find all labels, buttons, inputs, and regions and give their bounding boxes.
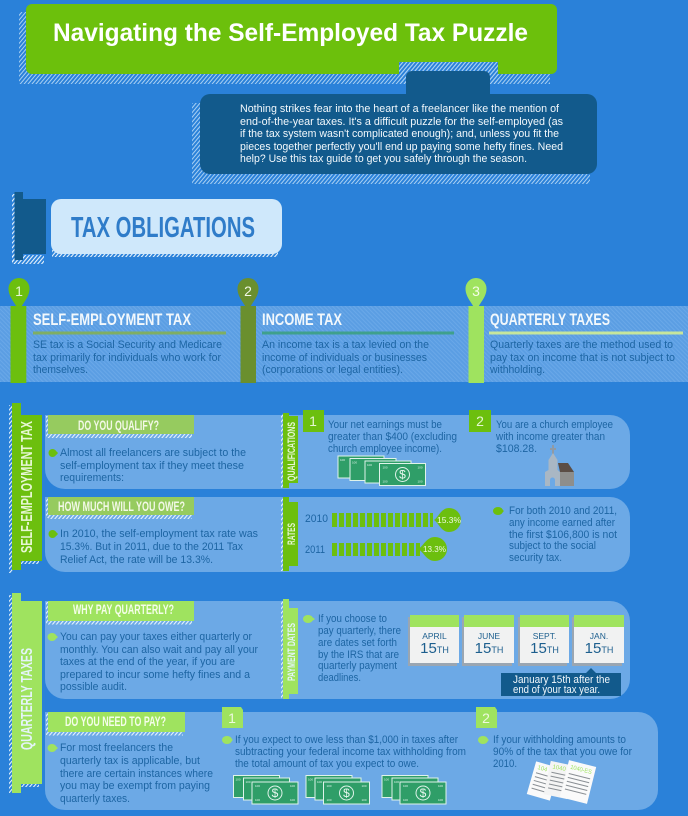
calendar: april [408, 615, 459, 666]
intro text: help? Use this tax guide to get you safely through the season. [240, 153, 527, 165]
icon: money stack: 100 [340, 458, 345, 462]
sidebar: quarterly taxes: QUARTERLY TAXES [19, 648, 36, 750]
section heading: tax obligations [12, 192, 282, 264]
icon: money stack a: 100 [290, 798, 295, 802]
why pay text: prepared to incur some hefty fines and a [60, 669, 251, 681]
column: self-employment tax: themselves. [33, 364, 88, 376]
panel: how much will you owe [45, 497, 630, 572]
column: quarterly taxes: Quarterly taxes are the method used to [490, 339, 673, 351]
tab: how much: HOW MUCH WILL YOU OWE? [58, 498, 185, 514]
payment dates text [303, 613, 401, 684]
column: quarterly taxes: QUARTERLY TAXES [490, 310, 610, 329]
icon: money stack b: 100 [362, 798, 367, 802]
icon: money stack: 100 [382, 480, 388, 484]
qualification 2: $108.28. [496, 443, 537, 455]
tab: do you need to pay [46, 712, 185, 736]
payment dates text: by the IRS that are [318, 649, 399, 661]
icon: money stack [338, 456, 426, 486]
icon: money stack a: $ [272, 786, 279, 800]
column: quarterly taxes: pay tax on income that is not subject to [490, 352, 675, 364]
icon: money stack: 100 [418, 480, 423, 484]
need to pay text: quarterly tax is applicable, but [60, 755, 200, 767]
payment dates text: are dates set forth [318, 637, 397, 649]
why pay text: monthly. You can also wait and pay all your [60, 644, 258, 656]
calendar: january: 15TH [585, 640, 613, 657]
icon: money stack c: 100 [438, 798, 443, 802]
calendar: september: 15TH [530, 640, 559, 657]
qualification 1: Your net earnings must be [328, 419, 442, 431]
column: income tax: (corporations or legal entities). [262, 364, 403, 376]
qualification 2: 2 [476, 413, 484, 429]
qualification 2: You are a church employee [496, 419, 613, 431]
icon: church [545, 445, 574, 486]
column: self-employment tax [8, 278, 226, 383]
tab: do you qualify: DO YOU QUALIFY? [78, 417, 159, 433]
payment dates text: quarterly payment [318, 660, 397, 672]
payment dates text: pay quarterly, there [318, 625, 401, 637]
icon: tax forms: 1040-ES [570, 765, 592, 776]
panel: do you need to pay [45, 707, 658, 810]
owe text: 15.3%. But in 2011, due to the 2011 Tax [60, 541, 243, 553]
chart: 2010 rate: 2010 [305, 513, 328, 525]
icon: tax forms: 1040 [552, 764, 567, 773]
icon: money stack b: 100 [326, 784, 332, 788]
exemption 2: 90% of the tax that you owe for [493, 746, 632, 758]
column: self-employment tax: tax primarily for individuals who work for [33, 352, 221, 364]
tab: why pay quarterly: WHY PAY QUARTERLY? [73, 601, 174, 617]
qualify text: requirements: [60, 472, 124, 484]
icon: tax forms [527, 760, 596, 804]
need to pay text: there are certain instances where [60, 768, 213, 780]
why pay text: taxes at the end of the year, if you are [60, 656, 235, 668]
icon: money stack b: $ [343, 786, 350, 800]
intro text: pieces together perfectly you'll end up paying some hefty fines. Need [240, 141, 563, 153]
need to pay text [48, 742, 213, 805]
sidebar: self-employment tax: SELF-EMPLOYMENT TAX [19, 421, 36, 553]
icon: money stack b: 100 [326, 798, 332, 802]
title banner [19, 4, 557, 84]
tab: do you qualify [46, 415, 194, 438]
calendar: september: SEPT. [533, 631, 556, 641]
icon: money stack c: $ [420, 786, 427, 800]
icon: money stack a: 100 [246, 780, 251, 784]
social security note: security tax. [509, 552, 562, 564]
side tab: rates [281, 497, 298, 571]
qualification 1 [303, 410, 457, 455]
column: income tax: An income tax is a tax levied on the [262, 339, 429, 351]
intro text: Nothing strikes fear into the heart of a freelancer like the mention of [240, 103, 560, 115]
icon: money stack c: 100 [403, 798, 408, 802]
exemption 1 [222, 707, 466, 770]
need to pay text: For most freelancers the [60, 742, 173, 754]
side tab: qualifications: QUALIFICATIONS [286, 422, 298, 481]
icon: money stack b: 100 [308, 778, 313, 782]
panel: do you qualify [45, 410, 630, 489]
sidebar: quarterly taxes [9, 593, 42, 793]
exemption 2 [476, 707, 632, 770]
need to pay text: you may be exempt from paying [60, 780, 210, 792]
social security note: subject to the social [509, 540, 596, 552]
owe text: Relief Act, the rate will be 13.3%. [60, 554, 213, 566]
icon: money stack b [306, 776, 370, 804]
exemption 1: the total amount of tax you expect to owe. [235, 758, 419, 770]
owe text [48, 528, 258, 566]
tab: how much [46, 497, 194, 519]
qualification 2: with income greater than [495, 431, 605, 443]
column: income tax: 2 [244, 283, 252, 299]
calendar: june: JUNE [478, 631, 500, 641]
icon: money stack b: 100 [317, 780, 322, 784]
sidebar: self-employment tax [9, 403, 42, 573]
social security note: For both 2010 and 2011, [509, 505, 617, 517]
why pay text: You can pay your taxes either quarterly or [60, 631, 252, 643]
qualification 1: greater than $400 (excluding [328, 431, 457, 443]
icon: money stack c: 100 [394, 780, 399, 784]
calendar: june [462, 615, 514, 666]
chart: 2011 rate [305, 537, 447, 561]
qualify text: self-employment tax if they meet these [60, 460, 244, 472]
calendar: april: 15TH [420, 640, 449, 657]
exemption 1: If you expect to owe less than $1,000 in taxes after [235, 734, 458, 746]
why pay text [48, 631, 258, 693]
icon: money stack c: 100 [384, 778, 389, 782]
intro text: end-of-the-year taxes. It's a difficult puzzle for the self-employed (as [240, 116, 564, 128]
calendar: june: 15TH [475, 640, 503, 657]
heading text: TAX OBLIGATIONS [71, 212, 255, 244]
column: income tax: INCOME TAX [262, 310, 342, 329]
icon: money stack c: 100 [403, 784, 408, 788]
side tab: rates: RATES [286, 523, 298, 545]
exemption 2: If your withholding amounts to [493, 734, 626, 746]
chart: 2011 rate: 13.3% [423, 544, 446, 554]
calendar: april: APRIL [422, 631, 447, 641]
callout: january note [501, 668, 621, 696]
social security note: the first $106,800 is not [509, 529, 617, 541]
calendar: september [518, 615, 569, 666]
side tab: payment dates: PAYMENT DATES [286, 623, 298, 681]
owe text: In 2010, the self-employment tax rate was [60, 528, 258, 540]
qualification 2 [469, 410, 613, 455]
intro text [240, 103, 564, 165]
qualification 1: 1 [309, 413, 317, 429]
chart: 2010 rate [305, 508, 461, 532]
qualification 1: church employee income). [328, 443, 442, 455]
column: self-employment tax: 1 [15, 283, 23, 299]
icon: money stack: $ [399, 468, 406, 482]
exemption 2: 2010. [493, 758, 517, 770]
qualify text [48, 447, 246, 484]
column: income tax: income of individuals or businesses [262, 352, 427, 364]
callout: january note: end of your tax year. [513, 684, 600, 696]
panel: why pay quarterly [45, 599, 630, 699]
intro panel [192, 71, 597, 184]
exemption 2: 2 [482, 710, 490, 726]
social security note: any income earned after [509, 517, 615, 529]
tab: why pay quarterly [46, 601, 194, 624]
qualify text: Almost all freelancers are subject to the [60, 447, 246, 459]
tab: do you need to pay: DO YOU NEED TO PAY? [65, 713, 166, 729]
band: three tax types [0, 278, 688, 383]
column: self-employment tax: SELF-EMPLOYMENT TAX [33, 310, 192, 329]
calendar: january: JAN. [590, 631, 608, 641]
icon: money stack: 100 [352, 460, 357, 464]
column: quarterly taxes [466, 278, 683, 383]
icon: money stack c [382, 776, 446, 804]
side tab: payment dates [281, 599, 298, 699]
icon: money stack: 100 [367, 463, 372, 467]
chart: 2011 rate: 2011 [305, 544, 325, 556]
exemption 1: 1 [228, 710, 236, 726]
chart: 2010 rate: 15.3% [437, 515, 461, 525]
title text: Navigating the Self-Employed Tax Puzzle [53, 19, 528, 47]
column: self-employment tax: SE tax is a Social Security and Medicare [33, 339, 222, 351]
calendar: january [572, 615, 624, 666]
icon: money stack a: 100 [236, 778, 241, 782]
icon: money stack b: 100 [362, 784, 367, 788]
icon: money stack: 100 [382, 466, 388, 470]
intro text: if the tax system wasn't complicated enough); and, unless you fit the [240, 128, 559, 140]
icon: money stack a: 100 [255, 784, 260, 788]
why pay text: possible audit. [60, 681, 127, 693]
icon: tax forms: 104 [537, 765, 548, 774]
icon: money stack a: 100 [255, 798, 260, 802]
payment dates text: If you choose to [318, 613, 387, 625]
column: quarterly taxes: 3 [472, 283, 480, 299]
side tab: qualifications [281, 413, 298, 488]
need to pay text: quarterly taxes. [60, 793, 130, 805]
icon: money stack: 100 [418, 466, 423, 470]
icon: money stack a [234, 776, 298, 804]
social security note [493, 505, 617, 564]
exemption 1: subtracting your federal income tax withholding from [235, 746, 466, 758]
column: income tax [238, 278, 454, 383]
icon: money stack c: 100 [438, 784, 443, 788]
payment dates text: deadlines. [318, 672, 361, 684]
callout: january note: January 15th after the [513, 674, 610, 686]
icon: money stack a: 100 [290, 784, 295, 788]
column: quarterly taxes: withholding. [489, 364, 545, 376]
